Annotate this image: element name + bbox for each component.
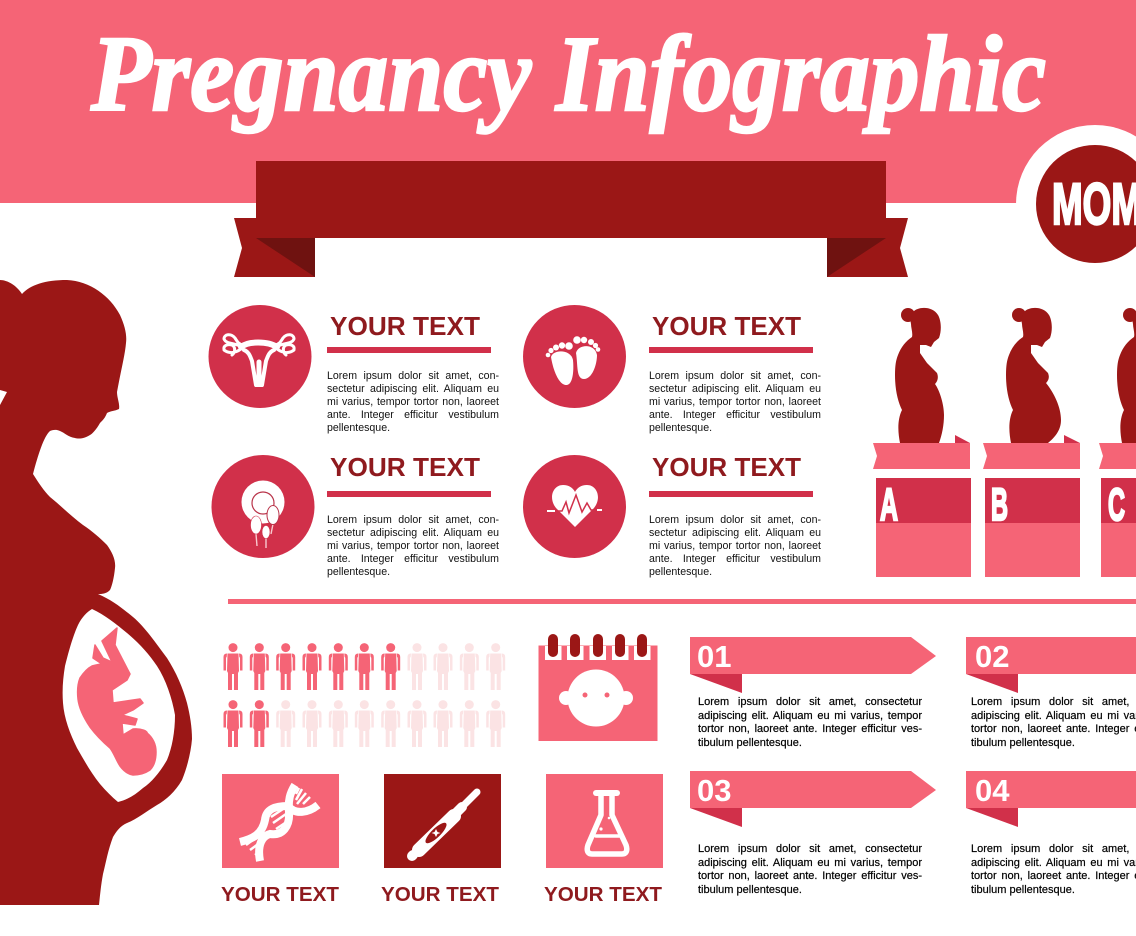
paragraph: sectetur adipiscing elit. Aliquam eu: [649, 527, 821, 539]
heading rule: [649, 491, 813, 497]
paragraph: ante. Integer efficitur vestibulum: [649, 553, 821, 565]
ribbon: [966, 637, 1136, 693]
panel: stage B: [983, 308, 1080, 577]
pictogram: people row two: [224, 700, 505, 747]
number: 04: [975, 773, 1010, 808]
label: YOUR TEXT: [381, 883, 499, 906]
paragraph: adipiscing elit. Aliquam eu mi varius, tempor: [698, 710, 922, 722]
paragraph: pellentesque.: [327, 422, 390, 434]
tile: pregnancy test: [384, 774, 501, 868]
icon: baby calendar: [538, 634, 658, 741]
paragraph: ante. Integer efficitur vestibulum: [327, 553, 499, 565]
paragraph: [327, 370, 499, 436]
paragraph: pellentesque.: [327, 566, 390, 578]
title: Pregnancy Infographic: [90, 15, 1046, 134]
paragraph: Lorem ipsum dolor sit amet, con-: [327, 514, 499, 526]
ribbon: [873, 435, 970, 469]
ribbon: [690, 771, 936, 827]
step 02: [966, 637, 1136, 752]
number: 03: [697, 773, 731, 808]
paragraph: sectetur adipiscing elit. Aliquam eu: [327, 527, 499, 539]
paragraph: pellentesque.: [649, 422, 712, 434]
label: YOUR TEXT: [221, 883, 339, 906]
paragraph: mi varius, tempor tortor non, laoreet: [649, 540, 821, 552]
figure silhouette: [1117, 308, 1136, 443]
heading: YOUR TEXT: [330, 311, 480, 341]
paragraph: [649, 514, 821, 580]
paragraph: Lorem ipsum dolor sit amet, con-: [649, 514, 821, 526]
ribbon: [983, 435, 1080, 469]
paragraph: [971, 843, 1136, 899]
letter: B: [991, 479, 1008, 530]
box: [876, 478, 971, 577]
heading: YOUR TEXT: [330, 452, 480, 482]
heading rule: [327, 347, 491, 353]
box: [1101, 478, 1136, 577]
paragraph: Lorem ipsum dolor sit amet, consectetur: [698, 843, 922, 855]
paragraph: Lorem ipsum dolor sit amet, con-: [649, 370, 821, 382]
figure silhouette: [895, 308, 944, 443]
pregnant woman silhouette: [0, 280, 192, 905]
number: 01: [697, 639, 731, 674]
icon: baby feet: [523, 305, 626, 408]
paragraph: [327, 514, 499, 580]
paragraph: tortor non, laoreet ante. Integer efficitur ves-: [698, 870, 922, 882]
tile: flask: [546, 774, 663, 868]
paragraph: tibulum pellentesque.: [971, 737, 1075, 749]
heading: YOUR TEXT: [652, 452, 801, 482]
paragraph: [971, 696, 1136, 752]
panel: stage A: [873, 308, 971, 577]
step 04: [966, 771, 1136, 899]
paragraph: Lorem ipsum dolor sit amet, consectetur: [698, 696, 922, 708]
step 01: [690, 637, 936, 752]
panel: stage C: [1099, 308, 1136, 577]
ribbon: [966, 771, 1136, 827]
paragraph: ante. Integer efficitur vestibulum: [327, 409, 499, 421]
paragraph: mi varius, tempor tortor non, laoreet: [649, 396, 821, 408]
title ribbon: [234, 161, 908, 277]
header band: [0, 0, 1136, 203]
paragraph: [698, 696, 922, 752]
figure silhouette: [1006, 308, 1061, 443]
letter: A: [880, 479, 898, 530]
paragraph: [698, 843, 922, 899]
paragraph: mi varius, tempor tortor non, laoreet: [327, 540, 499, 552]
paragraph: tortor non, laoreet ante. Integer efficitur ves-: [698, 723, 922, 735]
paragraph: Lorem ipsum dolor sit amet, con-: [327, 370, 499, 382]
step 03: [690, 771, 936, 899]
paragraph: mi varius, tempor tortor non, laoreet: [327, 396, 499, 408]
panel: text block one: [208, 305, 499, 436]
panel: text block three: [212, 452, 499, 580]
panel: text block four: [523, 452, 821, 580]
badge: MOM: [1016, 125, 1136, 283]
heading rule: [327, 491, 491, 497]
pictogram: people row one: [224, 643, 505, 690]
womb cutout: [63, 609, 175, 802]
tile: DNA: [222, 774, 339, 868]
paragraph: tibulum pellentesque.: [698, 884, 802, 896]
icon: uterus: [208, 305, 312, 408]
icon: egg and sperm: [212, 455, 314, 558]
paragraph: tibulum pellentesque.: [971, 884, 1075, 896]
icon: heartbeat: [523, 455, 626, 558]
paragraph: adipiscing elit. Aliquam eu mi varius, tempor: [698, 857, 922, 869]
paragraph: sectetur adipiscing elit. Aliquam eu: [649, 383, 821, 395]
paragraph: pellentesque.: [649, 566, 712, 578]
paragraph: tibulum pellentesque.: [698, 737, 802, 749]
paragraph: ante. Integer efficitur vestibulum: [649, 409, 821, 421]
panel: text block two: [523, 305, 821, 436]
heading rule: [649, 347, 813, 353]
paragraph: sectetur adipiscing elit. Aliquam eu: [327, 383, 499, 395]
paragraph: [649, 370, 821, 436]
number: 02: [975, 639, 1009, 674]
ribbon: [1099, 443, 1136, 469]
label: YOUR TEXT: [544, 883, 662, 906]
box: [985, 478, 1080, 577]
heading: YOUR TEXT: [652, 311, 801, 341]
fetus: [78, 628, 156, 775]
ribbon: [690, 637, 936, 693]
cutout behind neck: [0, 390, 7, 405]
